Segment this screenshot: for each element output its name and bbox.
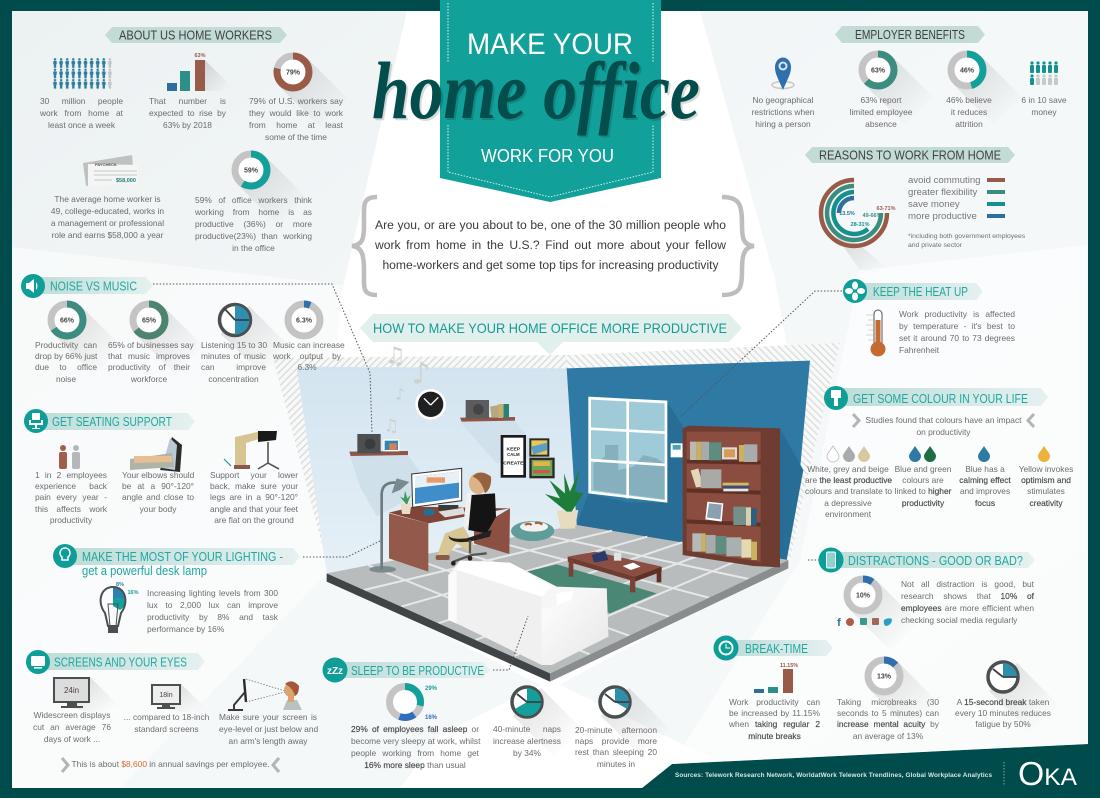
stat: back pain: pain every year - [35, 492, 107, 502]
logo: OKA [1018, 755, 1077, 792]
callout: annual savings: This is about $8,600 in annual savings per employee. [72, 759, 269, 769]
stat: 6.3% donut: 6.3% [296, 318, 313, 324]
heading: lighting [53, 544, 300, 578]
stat: blue calming [955, 446, 1015, 510]
heading: sleep [322, 658, 490, 682]
icon: light bulb chart: 8% [116, 582, 124, 588]
title: work for you: WORK FOR YOU [481, 145, 614, 166]
stat: white grey beige: a depressive [824, 498, 872, 508]
panel: break-time [714, 636, 1058, 743]
stat: eye level: Make sure your screen is [219, 712, 317, 722]
heading: noise vs music [21, 274, 153, 298]
stat: 65% donut: workforce [131, 374, 167, 384]
stat: 15 to 30 minutes clock: can improve [201, 362, 266, 372]
text: lighting levels: performance by 16% [147, 624, 224, 634]
connector lines [153, 284, 842, 670]
stat: 11.15% bar chart: Work productivity can [729, 697, 820, 707]
stat: paycheck: PAYCHECK [95, 162, 117, 167]
stat: blue and green: productivity [902, 498, 944, 508]
music notes: ♫ [383, 417, 399, 437]
stat: 15 to 30 minutes clock: minutes of music [201, 351, 266, 361]
footer sources and logo [675, 755, 1077, 792]
heading: colour: GET SOME COLOUR IN YOUR LIFE [853, 391, 1028, 406]
stat: 65% donut: productivity of their [108, 362, 190, 372]
stat: 15-second break clock: fatigue by 50% [975, 719, 1031, 729]
text: lighting levels [147, 587, 278, 637]
right shelf [460, 400, 515, 422]
stat: 59% donut: in the office [232, 243, 275, 253]
heading: screens: SCREENS AND YOUR EYES [54, 654, 187, 670]
text: temperature: Work productivity is affected [899, 309, 1015, 319]
legend: more productive [908, 211, 977, 222]
intro text with braces [352, 197, 754, 295]
wall clock [415, 389, 446, 420]
bookcase [683, 426, 780, 567]
stat: 15 to 30 minutes clock: concentration [208, 374, 259, 384]
stat: yellow: optimism and [1021, 475, 1071, 485]
stat: elbows: Your elbows should [122, 470, 194, 480]
stat: 66% donut: Productivity can [35, 340, 97, 350]
blue wall [567, 361, 810, 560]
stat: 79% donut [249, 56, 348, 145]
text: temperature: by temperature - it's best to [899, 321, 1015, 331]
coffee table [568, 551, 662, 592]
stat: elbows: be at a 90°-120° [122, 481, 194, 491]
stat: paycheck: 49, college-educated, works in [51, 206, 164, 216]
sofa [448, 561, 608, 665]
stat: 46% donut: 46% [960, 68, 975, 74]
text: lighting levels: productivity by 8% and task [147, 612, 278, 622]
stat: blue calming: focus [975, 498, 995, 508]
stat: 46% donut: attrition [955, 119, 983, 129]
music notes [383, 341, 431, 437]
heading: colour [824, 386, 1048, 410]
stat: 20-minute naps clock: naps provide more [575, 736, 657, 746]
panel: get seating support [24, 409, 298, 528]
stat: 10% donut [847, 579, 918, 650]
stat: 18in monitor: ... compared to 18-inch [124, 712, 209, 722]
stat: 13% donut [837, 660, 939, 743]
text: studies found [853, 414, 1034, 439]
rug [527, 564, 657, 613]
stat: yellow: creativity [1029, 498, 1063, 508]
stat: eye level: eye-level or just below and [219, 724, 318, 734]
panel: make the most of your lighting [53, 544, 300, 637]
posters [501, 435, 555, 478]
stat: elbows: your body [140, 504, 176, 514]
stat: 59% donut [195, 154, 312, 256]
thermostat [671, 443, 683, 457]
stat: paycheck: $58,000 [116, 178, 136, 184]
panel: get some colour in your life [805, 386, 1078, 522]
stat: white grey beige: are the least productive [805, 475, 892, 485]
panel: reasons to work from home [805, 147, 1026, 275]
stat: 13% donut: Taking microbreaks (30 [837, 697, 939, 707]
heading: seating: GET SEATING SUPPORT [52, 414, 172, 429]
stat: rise by 63% bar chart: That number is [149, 96, 226, 106]
stat: 66% donut: 66% [60, 318, 75, 324]
stat: 30 million people: work from home at [40, 108, 123, 118]
stat: 66% donut: noise [56, 374, 76, 384]
posters: CALM [507, 452, 520, 457]
stat: paycheck [50, 155, 165, 243]
person at desk [436, 472, 496, 566]
stat: 65% donut: 65% [142, 318, 157, 324]
stat: 6 in 10 save money [1014, 61, 1074, 122]
posters: CREATE [503, 461, 524, 467]
stat: lower back: Support your lower [210, 470, 298, 480]
stat: no geographical restrictions: hiring a person [755, 119, 811, 129]
stat: paycheck: The average home worker is [54, 194, 161, 204]
heading: screens [26, 650, 205, 674]
text: distraction [901, 578, 1034, 628]
stat: yellow: stimulates [1027, 486, 1065, 496]
legend: avoid commuting [908, 175, 981, 186]
stat: 30 million people: 30 million people [40, 96, 123, 106]
stat: 15 to 30 minutes clock [201, 304, 290, 386]
stat: 6.3% donut: work output by [273, 351, 341, 361]
heading: sleep: SLEEP TO BE PRODUCTIVE [351, 663, 484, 678]
title banner [372, 0, 702, 202]
stat: 24in monitor: 24in [64, 686, 79, 695]
stat: 11.15% bar chart [729, 663, 820, 743]
legend [908, 175, 1005, 222]
heading: distractions [818, 548, 1035, 572]
radial bar chart: 28-31% [851, 222, 870, 228]
stat: blue calming: and improves [960, 486, 1010, 496]
stat: white grey beige: environment [825, 509, 871, 519]
stat: yellow: Yellow invokes [1019, 464, 1073, 474]
callout: annual savings [62, 758, 279, 772]
stat: 15-second break clock: every 10 minutes reduces [955, 708, 1051, 718]
heading: lighting: get a powerful desk lamp [82, 563, 207, 578]
stat: white grey beige: White, grey and beige [807, 464, 889, 474]
icons: social media: f [837, 617, 841, 629]
left wall [297, 367, 577, 573]
stat: 20-minute naps clock: minutes in [597, 759, 635, 769]
stat: 63% donut: limited employee [850, 107, 912, 117]
stat: 18in monitor [120, 684, 213, 737]
intro text with braces: home-workers and get some top tips for increasing productivity [382, 258, 719, 272]
sources: Sources: Telework Research Network, WorldatWork Telework Trendlines, Global Workplace Analytics [675, 772, 992, 779]
stat: 10% donut: 10% [856, 592, 871, 600]
stat: 24in monitor: Widescreen displays [34, 710, 110, 720]
stat: white grey beige: colours and translate to [805, 486, 892, 496]
text: studies found: Studies found that colours have an impact [866, 415, 1021, 425]
stat: 6.3% donut: 6.3% [297, 362, 317, 372]
stat: 6.3% donut [273, 304, 341, 376]
stat: back pain: this affects work [35, 504, 107, 514]
panel: screens and your eyes [26, 650, 317, 772]
text: studies found: on productivity [916, 427, 970, 437]
stat: 11.15% bar chart: 11.15% [780, 663, 798, 669]
intro text with braces: Are you, or are you about to be, one of the 30 million people who [375, 218, 726, 232]
radial bar chart: 13.5% [839, 211, 855, 217]
stat: back pain: 1 in 2 employees [35, 470, 107, 480]
stat: 24in monitor: days of work ... [44, 734, 100, 744]
stat: 13% donut: an average of 13% [853, 731, 923, 741]
stat: 63% donut: 63% report [861, 95, 901, 105]
stat: 15-second break clock: A 15-second break taken [957, 697, 1049, 707]
stat: lower back: legs are in a 90°-120° [210, 492, 298, 502]
stat: 63% donut: absence [865, 119, 897, 129]
stat: 15-second break clock [950, 662, 1058, 733]
heading: seating [24, 409, 195, 433]
stat: 24in monitor [33, 677, 125, 747]
stat: 79% donut: some of the time [265, 132, 327, 142]
stat: 30 million people [40, 58, 123, 135]
stat: rise by 63% bar chart [149, 53, 235, 135]
floor edge [327, 573, 550, 682]
stat: 79% donut: from home at least [249, 120, 343, 130]
stat: 13% donut: seconds to 5 minutes) can [837, 708, 939, 718]
window [588, 397, 667, 503]
text: temperature: set it around 70 to 73 degrees [899, 333, 1015, 343]
text: temperature [899, 308, 1015, 358]
text: lighting levels: Increasing lighting levels from 300 [147, 588, 278, 598]
stat: 66% donut: due to office [35, 362, 97, 372]
stat: 40-minute naps clock: by 34% [513, 748, 541, 758]
stat: blue calming: calming effect [959, 475, 1011, 485]
stat: sleep donut [351, 686, 479, 771]
heading: employer benefits: EMPLOYER BENEFITS [855, 28, 965, 42]
heading: heat: KEEP THE HEAT UP [873, 284, 968, 299]
title: home office: home office [372, 45, 700, 136]
intro text with braces: work from home in the U.S.? Find out more about your fellow [375, 238, 726, 252]
stat: 65% donut: that music improves [108, 351, 190, 361]
stat: 20-minute naps clock: rest than sleeping 20 [575, 747, 657, 757]
stat: 11.15% bar chart: be increased by 11.15% [729, 708, 820, 718]
stat: back pain: productivity [50, 515, 92, 525]
stat: back pain [35, 445, 107, 528]
stat: rise by 63% bar chart: expected to rise by [149, 108, 226, 118]
stat: white grey beige [805, 446, 891, 522]
stat: blue and green [890, 446, 956, 510]
text: lighting levels: lux to 2,000 lux can improve [147, 600, 278, 610]
stat: 59% donut: 59% of office workers think [195, 195, 312, 205]
stat: lower back: angle and that your feet [210, 504, 298, 514]
stat: 20-minute naps clock: 20-minute afternoon [575, 725, 657, 735]
text: distraction: research shows that 10% of [901, 591, 1034, 601]
legend: save money [908, 199, 960, 210]
text: distraction: Not all distraction is good, but [901, 579, 1034, 589]
heading: noise vs music: NOISE VS MUSIC [50, 278, 137, 294]
music notes: ♪ [395, 384, 405, 403]
stat: 63% donut [841, 54, 933, 134]
stat: yellow [1014, 446, 1078, 510]
stat: 79% donut: they would like to work [249, 108, 343, 118]
stat: 6 in 10 save money: money [1031, 107, 1057, 117]
stat: 24in monitor: cut an average 76 [33, 722, 111, 732]
panel: noise vs music [21, 274, 341, 386]
stat: 18in monitor: 18in [159, 692, 173, 699]
stat: sleep donut: become very sleepy at work, whilst [351, 736, 480, 746]
stat: elbows [122, 437, 194, 516]
legend: greater flexibility [908, 187, 978, 198]
icon: thermometer [866, 310, 886, 356]
stat: 79% donut: 79% of U.S. workers say [249, 96, 343, 106]
stat: 11.15% bar chart: when taking regular 2 [729, 719, 820, 729]
heading: about us: ABOUT US HOME WORKERS [119, 28, 272, 42]
stat: 6 in 10 save money: 6 in 10 save [1021, 95, 1067, 105]
floor plant [545, 470, 583, 529]
stat: 11.15% bar chart: minute breaks [748, 731, 801, 741]
stat: 59% donut: 59% [244, 168, 259, 174]
stat: elbows: angle and close to [122, 492, 194, 502]
stat: 40-minute naps clock: 40-minute naps [493, 724, 561, 734]
stat: no geographical restrictions: No geographical [752, 95, 814, 105]
text: temperature: Fahrenheit [899, 345, 939, 355]
panel: sleep to be productive [322, 658, 670, 773]
stat: paycheck: role and earns $58,000 a year [52, 230, 163, 240]
stat: 15 to 30 minutes clock: Listening 15 to 30 [201, 340, 267, 350]
stat: 40-minute naps clock [493, 687, 582, 761]
heading: reasons: REASONS TO WORK FROM HOME [819, 148, 1001, 162]
stat: 65% donut: 65% of businesses say [108, 340, 194, 350]
radial bar chart [821, 180, 896, 275]
room illustration [273, 341, 840, 682]
stat: blue and green: Blue and green [895, 464, 951, 474]
stat: rise by 63% bar chart: 63% by 2018 [163, 120, 212, 130]
stat: 59% donut: productive (36%) or more [195, 219, 312, 229]
heading: how to make your home office more productive: HOW TO MAKE YOUR HOME OFFICE MORE PRODUCTIVE [373, 320, 727, 336]
stat: 13% donut: 13% [877, 674, 892, 680]
stat: 30 million people: least once a week [48, 120, 115, 130]
stat: 59% donut: productive(23%) than working [195, 231, 312, 241]
footnote [908, 233, 1026, 249]
heading: distractions: DISTRACTIONS - GOOD OR BAD? [848, 553, 1023, 568]
icon: light bulb chart: 16% [127, 590, 139, 596]
stat: sleep donut: 29% of employees fall asleep or [351, 724, 479, 734]
stat: 65% donut [108, 304, 204, 386]
icons: social media [837, 617, 892, 629]
heading: heat [843, 279, 983, 303]
stat: no geographical restrictions [745, 58, 821, 134]
stat: 46% donut: 46% believe [946, 95, 992, 105]
heading: break-time [714, 636, 833, 660]
stat: lower back: are flat on the ground [214, 515, 294, 525]
stat: rise by 63% bar chart: 63% [194, 53, 206, 59]
stat: blue and green: linked to higher [895, 486, 951, 496]
heading: employer benefits [835, 26, 985, 43]
title: home office: home office [374, 47, 702, 138]
panel: distractions [818, 548, 1035, 650]
panel: about us home workers [40, 27, 348, 256]
footnote: *including both government employees [908, 233, 1026, 240]
stat: 46% donut: it reduces [951, 107, 987, 117]
title: make your: MAKE YOUR [467, 28, 633, 61]
desk plant [400, 491, 411, 514]
stat: 6.3% donut: Music can increase [273, 340, 345, 350]
stat: lower back [210, 431, 298, 528]
stat: 63% donut: 63% [871, 68, 886, 74]
floor lamp [369, 478, 409, 573]
footnote: and private sector [908, 242, 963, 249]
text: distraction: checking social media regularly [901, 615, 1017, 625]
stat: eye level [219, 679, 317, 749]
stat: sleep donut: 29% [425, 686, 438, 692]
left shelf [349, 434, 408, 456]
stat: 18in monitor: standard screens [134, 724, 199, 734]
heading: how to make your home office more productive [360, 314, 742, 355]
panel: keep the heat up [843, 279, 1015, 358]
stat: 40-minute naps clock: increase alertness [493, 736, 561, 746]
stat: 66% donut: drop by 66% just [35, 351, 97, 361]
stat: sleep donut: 16% [425, 715, 438, 721]
heading: lighting: MAKE THE MOST OF YOUR LIGHTING - [82, 549, 283, 564]
dog bed [511, 521, 554, 541]
stat: back pain: experience back [35, 481, 107, 491]
stat: 66% donut [35, 304, 122, 386]
stat: 20-minute naps clock [575, 687, 670, 773]
stat: lower back: back, make sure your [210, 481, 298, 491]
computer monitor [412, 468, 465, 517]
stat: 59% donut: working from home is as [195, 207, 312, 217]
radial bar chart: 49-66% [863, 213, 882, 219]
music notes: ♪ [412, 356, 431, 391]
music notes: ♫ [385, 341, 406, 369]
heading: sleep: zZz [327, 666, 343, 677]
stat: sleep donut: people working from home get [351, 748, 479, 758]
stat: sleep donut: 16% more sleep than usual [364, 760, 466, 770]
stat: blue calming: Blue has a [965, 464, 1005, 474]
radial bar chart: 63-71% [877, 206, 896, 212]
floor [327, 525, 788, 673]
stat: 46% donut [934, 54, 1022, 134]
icon: light bulb chart [101, 582, 139, 633]
panel: employer benefits [745, 26, 1074, 134]
stat: no geographical restrictions: restrictions when [752, 107, 814, 117]
desk [389, 507, 510, 572]
text: distraction: employees are more efficient when [901, 603, 1034, 613]
stat: 79% donut: 79% [286, 70, 301, 76]
stat: blue and green: colours are [902, 475, 944, 485]
stat: eye level: an arm's length away [229, 736, 307, 746]
heading: break-time: BREAK-TIME [745, 641, 808, 656]
stat: 13% donut: increase mental acuity by [837, 719, 939, 729]
stat: paycheck: a management or professional [51, 218, 164, 228]
posters: KEEP [507, 447, 521, 453]
